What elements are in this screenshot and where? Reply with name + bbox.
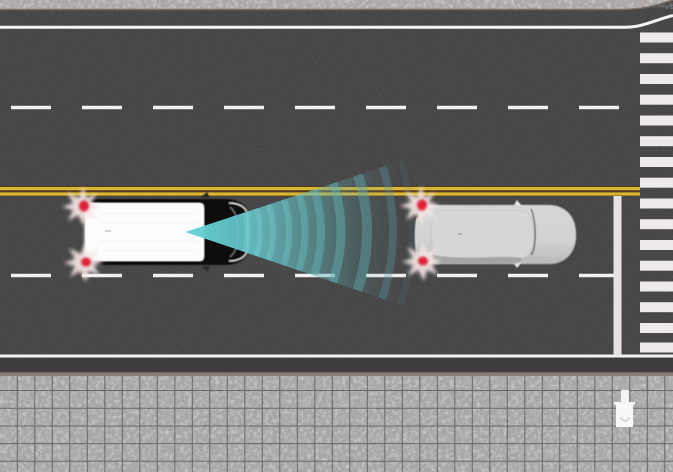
van rear edge: [83, 205, 85, 260]
warning flare: van rear upper: [62, 187, 102, 226]
white van, top view: [83, 192, 248, 272]
pedestrian icon, top view: [614, 390, 635, 427]
crosswalk stripes: [640, 32, 673, 352]
lane dashes lower: [11, 274, 619, 277]
warning flare: car rear lower: [402, 242, 442, 281]
top sidewalk with curved corner: [0, 0, 673, 10]
van white roof: [83, 203, 204, 261]
van mirrors: [201, 192, 210, 272]
car windshield: [531, 209, 535, 255]
van windshield trim: [229, 203, 248, 261]
car mirrors: [514, 200, 522, 268]
warning flare: car rear upper: [400, 186, 440, 225]
road edge lines: [0, 16, 673, 356]
stop line: [614, 196, 622, 356]
van roof ribs: [100, 214, 196, 250]
car rear window edge: [416, 218, 417, 254]
lane dashes upper: [11, 106, 619, 109]
silver car, top view: [416, 200, 576, 268]
warning flare: van rear lower: [64, 243, 104, 282]
bottom sidewalk paving: [0, 372, 673, 472]
sensor beam with radar arcs: [186, 160, 414, 306]
car cabin: [431, 210, 534, 258]
double yellow centre line: [0, 186, 640, 196]
car door shadow: [432, 255, 522, 263]
car body: [416, 205, 576, 264]
van black cab and hood: [88, 199, 248, 265]
